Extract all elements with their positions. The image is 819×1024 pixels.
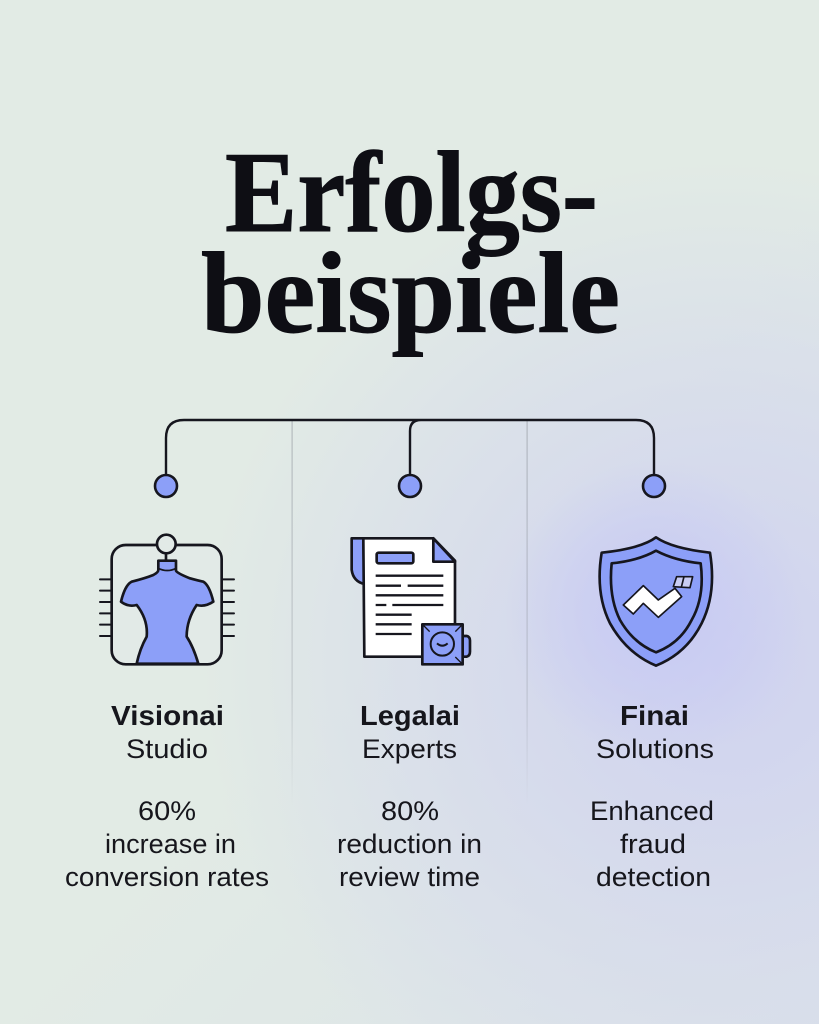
name: Finai	[620, 700, 689, 731]
column: Visionai: conversion rates	[65, 862, 269, 892]
subtitle: Studio	[126, 734, 208, 764]
subtitle: Solutions	[596, 734, 714, 764]
result: 80%	[381, 796, 439, 826]
column: Visionai	[65, 700, 269, 892]
title	[201, 129, 620, 358]
result: 60%	[138, 796, 196, 826]
title: Erfolgs-	[225, 129, 598, 257]
result: Enhanced	[590, 796, 714, 826]
name: Legalai	[360, 700, 460, 731]
node: right	[643, 475, 665, 497]
column: Legalai	[337, 700, 482, 892]
column: Legalai: reduction in	[337, 829, 482, 859]
column: Legalai: review time	[339, 862, 480, 892]
column: Visionai: increase in	[105, 829, 236, 859]
title: beispiele	[201, 230, 620, 358]
subtitle: Experts	[362, 734, 457, 764]
node: left	[155, 475, 177, 497]
column: Finai: detection	[596, 862, 711, 892]
connector tree	[155, 420, 665, 497]
name: Visionai	[111, 700, 224, 731]
icon: shield with chart	[600, 537, 712, 666]
node: middle	[399, 475, 421, 497]
column: Finai	[590, 700, 714, 892]
column: Finai: fraud	[620, 829, 686, 859]
icon: dress form	[100, 535, 234, 664]
icon: document with mug	[352, 538, 470, 664]
